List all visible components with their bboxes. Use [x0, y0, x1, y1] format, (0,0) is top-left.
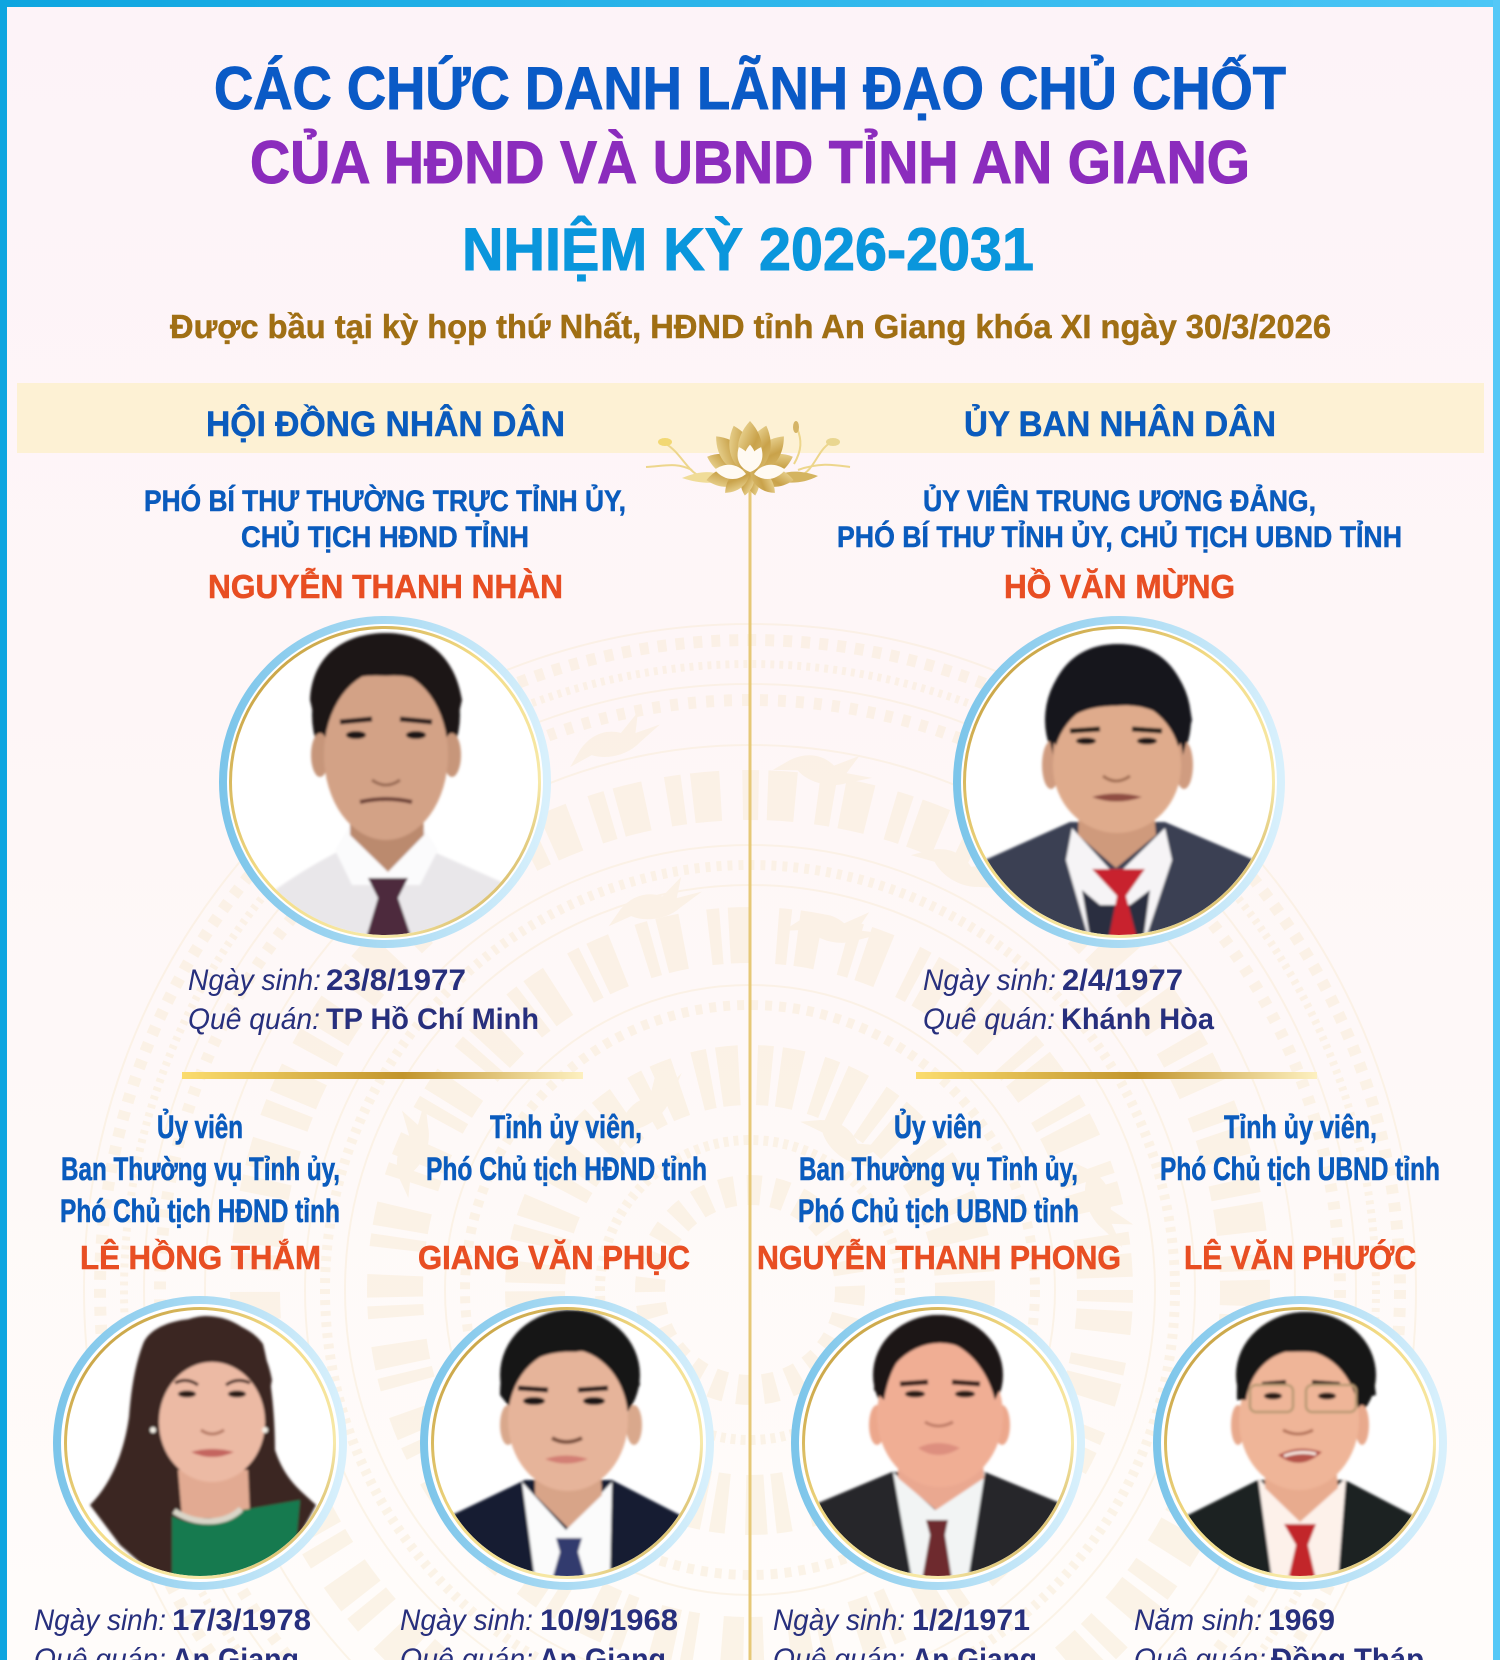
- name: Hồ Văn Mừng: HỒ VĂN MỪNG: [1004, 568, 1235, 605]
- panel: UBND chairman: [837, 484, 1402, 1036]
- role: Lê Văn Phước: Tỉnh ủy viên,: [1224, 1109, 1377, 1145]
- role: Nguyễn Thanh Phong: Phó Chủ tịch UBND tỉnh: [798, 1193, 1079, 1229]
- panel: Giang Văn Phục: [400, 1109, 710, 1660]
- role: Nguyễn Thanh Phong: Ban Thường vụ Tỉnh ủy,: [799, 1151, 1078, 1187]
- portrait: Nguyễn Thanh Phong: [795, 1300, 1081, 1586]
- info: Lê Hồng Thắm: Ngày sinh:: [34, 1604, 166, 1637]
- info: Lê Văn Phước: [1134, 1604, 1424, 1660]
- info: Lê Hồng Thắm: 17/3/1978: [172, 1604, 311, 1637]
- info: Hồ Văn Mừng: [923, 964, 1214, 1036]
- info: Nguyễn Thanh Nhàn: [188, 964, 539, 1036]
- divider right: [916, 1072, 1317, 1079]
- role: chairman HĐND: CHỦ TỊCH HĐND TỈNH: [241, 520, 529, 554]
- info: Lê Hồng Thắm: [34, 1604, 311, 1660]
- info: Lê Văn Phước: Năm sinh:: [1134, 1604, 1262, 1637]
- info: Nguyễn Thanh Nhàn: Quê quán:: [188, 1003, 320, 1036]
- info: Hồ Văn Mừng: 2/4/1977: [1062, 964, 1183, 997]
- info: Nguyễn Thanh Nhàn: 23/8/1977: [326, 964, 466, 997]
- role: chairman HĐND: [144, 484, 626, 554]
- name: Nguyễn Thanh Phong: NGUYỄN THANH PHONG: [757, 1239, 1121, 1276]
- role: Giang Văn Phục: Tỉnh ủy viên,: [490, 1109, 642, 1145]
- subtitle: Được bầu tại kỳ họp thứ Nhất, HĐND tỉnh An Giang khóa XI ngày 30/3/2026: [170, 308, 1331, 345]
- role: Lê Hồng Thắm: Ban Thường vụ Tỉnh ủy,: [61, 1151, 340, 1187]
- info: Giang Văn Phục: [400, 1604, 678, 1660]
- role: Lê Hồng Thắm: Ủy viên: [157, 1109, 243, 1145]
- name: Lê Văn Phước: LÊ VĂN PHƯỚC: [1184, 1239, 1416, 1276]
- role: Nguyễn Thanh Phong: Ủy viên: [894, 1109, 982, 1145]
- center divider line: [748, 490, 752, 1660]
- panel: Nguyễn Thanh Phong: [757, 1109, 1121, 1660]
- title: [214, 55, 1286, 283]
- background bronze drum pattern: [84, 624, 1416, 1660]
- role: chairman HĐND: PHÓ BÍ THƯ THƯỜNG TRỰC TỈNH ỦY,: [144, 484, 626, 518]
- info: Hồ Văn Mừng: Ngày sinh:: [923, 964, 1056, 997]
- info: Nguyễn Thanh Phong: [773, 1604, 1037, 1660]
- portrait: Lê Hồng Thắm: [57, 1300, 343, 1586]
- panel: HĐND chairman: [144, 484, 626, 1036]
- role: Lê Hồng Thắm: Phó Chủ tịch HĐND tỉnh: [60, 1193, 340, 1229]
- info: Nguyễn Thanh Phong: Ngày sinh:: [773, 1604, 905, 1637]
- info: Hồ Văn Mừng: Khánh Hòa: [1061, 1003, 1214, 1036]
- section header band: [17, 383, 1484, 453]
- role: chairman UBND: ỦY VIÊN TRUNG ƯƠNG ĐẢNG,: [923, 484, 1316, 518]
- role: Giang Văn Phục: Phó Chủ tịch HĐND tỉnh: [426, 1151, 707, 1187]
- section header band: HỘI ĐỒNG NHÂN DÂN: [206, 404, 565, 444]
- title: CÁC CHỨC DANH LÃNH ĐẠO CHỦ CHỐT: [214, 55, 1286, 122]
- section header band: ỦY BAN NHÂN DÂN: [964, 404, 1276, 444]
- role: Giang Văn Phục: [426, 1109, 707, 1187]
- role: chairman UBND: [837, 484, 1402, 554]
- info: Giang Văn Phục: Ngày sinh:: [400, 1604, 533, 1637]
- panel: Lê Hồng Thắm: [34, 1109, 343, 1660]
- portrait: Lê Văn Phước: [1157, 1300, 1443, 1586]
- info: Giang Văn Phục: 10/9/1968: [540, 1604, 678, 1637]
- info: Lê Văn Phước: 1969: [1268, 1604, 1335, 1637]
- portrait: Nguyễn Thanh Nhàn: [223, 620, 547, 945]
- name: Nguyễn Thanh Nhàn: NGUYỄN THANH NHÀN: [208, 568, 563, 605]
- divider left: [182, 1072, 583, 1079]
- panel: Lê Văn Phước: [1134, 1109, 1443, 1660]
- role: Lê Hồng Thắm: [60, 1109, 340, 1229]
- info: Nguyễn Thanh Nhàn: TP Hồ Chí Minh: [326, 1003, 539, 1036]
- portrait: Giang Văn Phục: [424, 1300, 710, 1586]
- name: Lê Hồng Thắm: LÊ HỒNG THẮM: [80, 1239, 321, 1276]
- role: chairman UBND: PHÓ BÍ THƯ TỈNH ỦY, CHỦ TỊCH UBND TỈNH: [837, 520, 1402, 554]
- info: Nguyễn Thanh Nhàn: Ngày sinh:: [188, 964, 321, 997]
- info: Nguyễn Thanh Phong: 1/2/1971: [912, 1604, 1030, 1637]
- title: NHIỆM KỲ 2026-2031: [462, 216, 1034, 283]
- icon: golden lotus: [646, 421, 850, 498]
- name: Giang Văn Phục: GIANG VĂN PHỤC: [418, 1239, 690, 1276]
- role: Nguyễn Thanh Phong: [798, 1109, 1079, 1229]
- portrait: Hồ Văn Mừng: [957, 620, 1281, 950]
- info: Hồ Văn Mừng: Quê quán:: [923, 1003, 1055, 1036]
- title: CỦA HĐND VÀ UBND TỈNH AN GIANG: [250, 129, 1250, 196]
- role: Lê Văn Phước: [1160, 1109, 1440, 1187]
